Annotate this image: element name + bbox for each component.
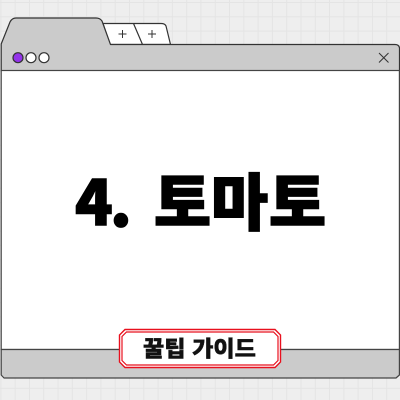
window control dots	[13, 53, 49, 63]
icon: close	[379, 53, 388, 62]
icon: plus	[118, 30, 126, 38]
title: 4	[75, 153, 113, 243]
title: 마	[211, 153, 268, 243]
window header	[1, 18, 399, 71]
title: 토	[269, 153, 326, 243]
window body	[1, 70, 399, 350]
title	[75, 153, 326, 243]
title: .	[110, 153, 132, 243]
icon: plus 2	[148, 30, 156, 38]
inactive tabs	[103, 24, 170, 44]
title: 토	[154, 153, 211, 243]
badge label: 꿀팁 가이드	[143, 332, 256, 364]
window footer	[1, 350, 399, 378]
badge	[120, 330, 280, 368]
